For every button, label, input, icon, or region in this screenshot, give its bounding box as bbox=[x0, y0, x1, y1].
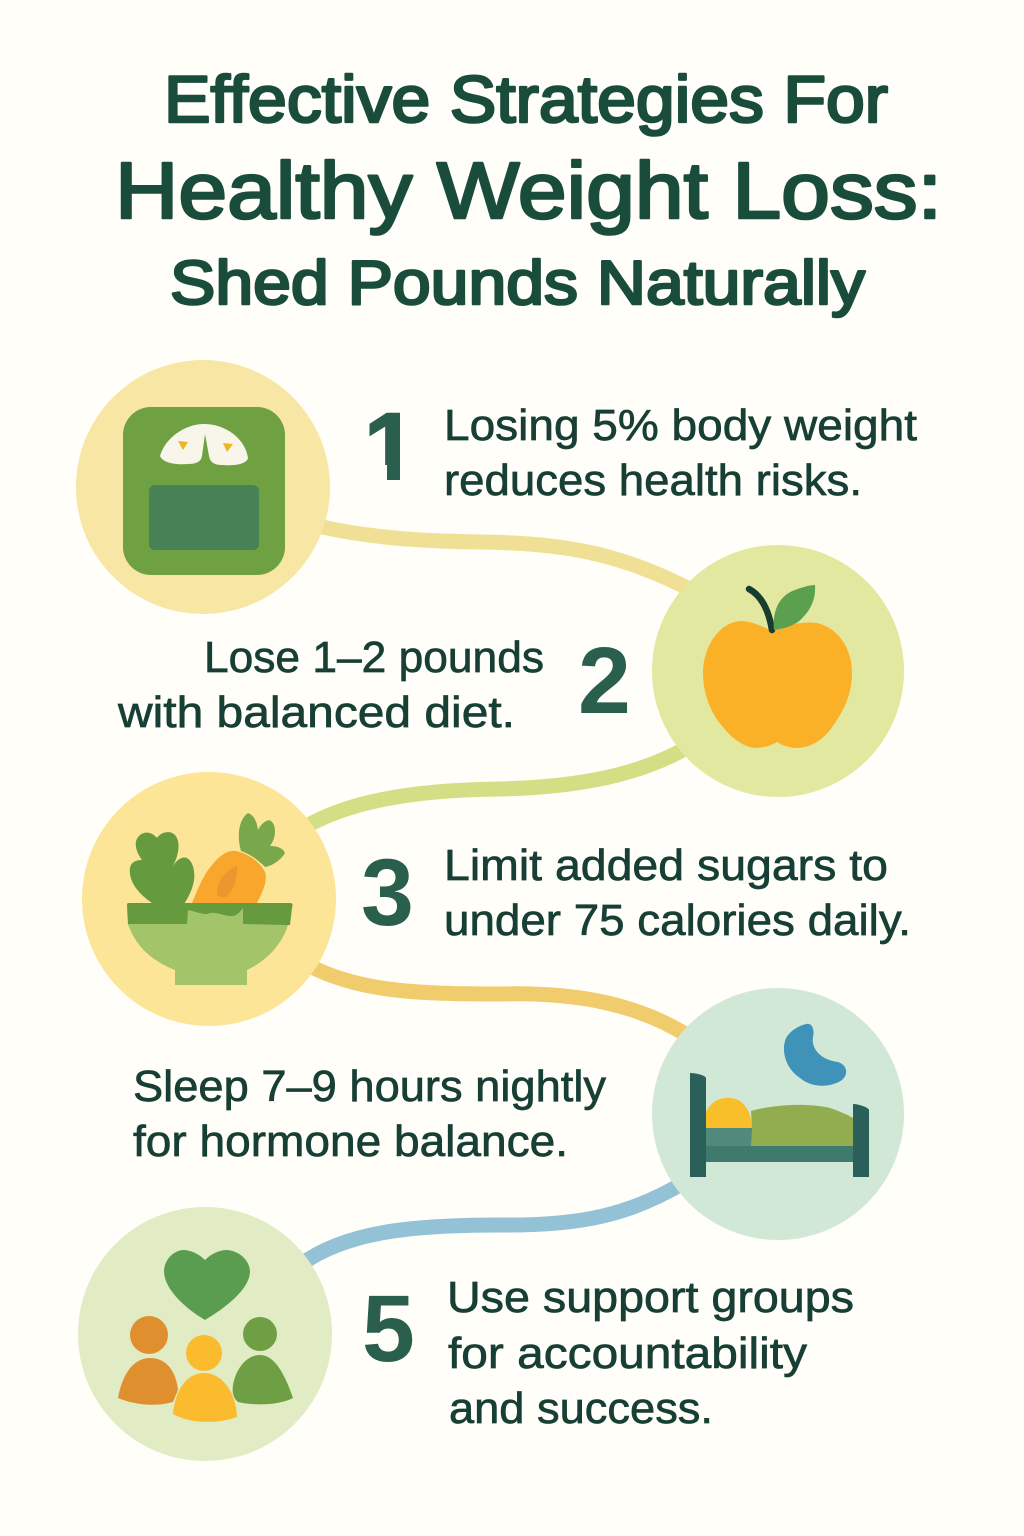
panel: step 2 bbox=[117, 545, 904, 797]
connector: step 4 to 5 bbox=[300, 1182, 685, 1265]
title bbox=[115, 62, 942, 318]
text: step 1: reduces health risks. bbox=[444, 456, 862, 505]
text: step 4: Sleep 7–9 hours nightly bbox=[133, 1062, 606, 1111]
icon: support group and heart bbox=[78, 1207, 332, 1461]
text: step 4 bbox=[133, 1062, 606, 1166]
text: step 5: for accountability bbox=[448, 1329, 807, 1378]
panel: step 5 bbox=[78, 1207, 854, 1461]
number 3: 3 bbox=[361, 840, 414, 946]
text: step 2: Lose 1–2 pounds bbox=[204, 633, 544, 682]
text: step 3: Limit added sugars to bbox=[444, 841, 888, 890]
text: step 2: with balanced diet. bbox=[117, 688, 515, 737]
panel: step 1 bbox=[76, 360, 917, 614]
icon: apple bbox=[652, 545, 904, 797]
number 1: 1 bbox=[364, 394, 417, 500]
number 5: 5 bbox=[362, 1276, 415, 1382]
text: step 3: under 75 calories daily. bbox=[444, 896, 911, 945]
panel: step 3 bbox=[82, 772, 911, 1026]
title: Shed Pounds Naturally bbox=[170, 249, 865, 318]
number 2: 2 bbox=[578, 628, 631, 734]
connector: step 2 to 3 bbox=[300, 746, 690, 830]
text: step 4: for hormone balance. bbox=[133, 1117, 568, 1166]
icon: bed and moon bbox=[652, 988, 904, 1240]
text: step 5: and success. bbox=[449, 1384, 713, 1433]
text: step 1: Losing 5% body weight bbox=[444, 401, 917, 450]
connector: step 3 to 4 bbox=[310, 966, 690, 1037]
text: step 5: Use support groups bbox=[447, 1273, 854, 1322]
icon: weighing scale bbox=[76, 360, 330, 614]
text: step 2 bbox=[117, 633, 544, 737]
text: step 3 bbox=[444, 841, 911, 945]
text: step 1 bbox=[444, 401, 917, 505]
connector: step 1 to 2 bbox=[318, 526, 695, 592]
panel: step 4 bbox=[133, 988, 904, 1240]
icon: vegetable bowl bbox=[82, 772, 336, 1026]
text: step 5 bbox=[447, 1273, 854, 1433]
title: Effective Strategies For bbox=[164, 62, 888, 136]
title: Healthy Weight Loss: bbox=[115, 146, 942, 235]
